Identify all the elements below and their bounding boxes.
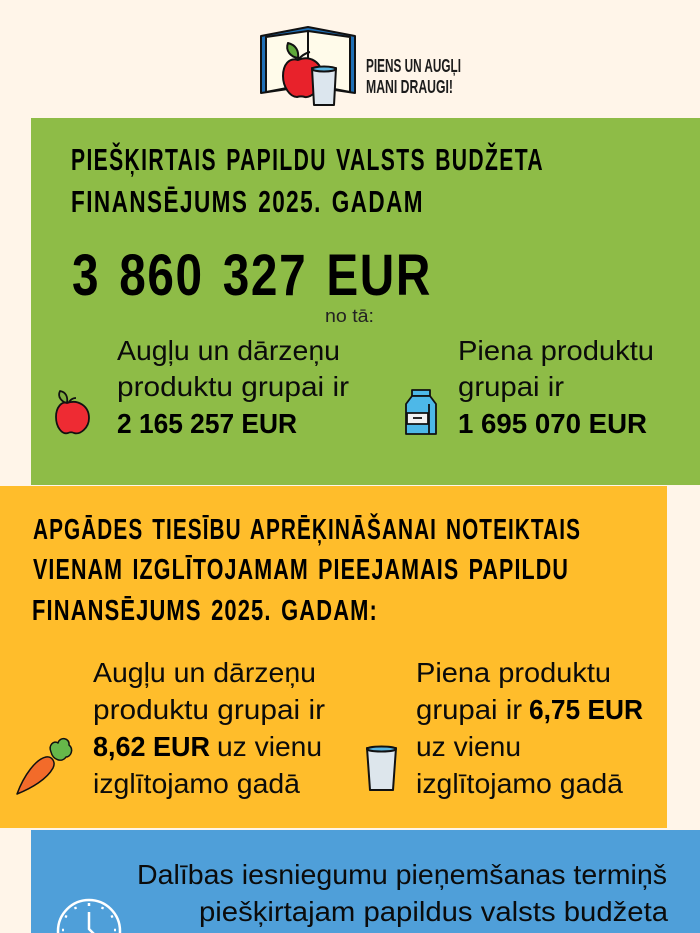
text: fruit and vegetable per pupil: 8,62 EUR: [93, 731, 210, 762]
text: dairy per pupil: Piena produktu: [416, 657, 611, 688]
panel: per-pupil funding: [0, 486, 667, 828]
text: dairy per pupil: izglītojamo gadā: [416, 768, 623, 799]
panel: application deadline: [31, 830, 700, 933]
text: dairy group: Piena produktu: [458, 335, 654, 366]
icon: open book with apple and milk glass: [261, 27, 355, 105]
text: fruit and vegetable per pupil: uz vienu: [217, 731, 322, 762]
text: fruit and vegetable per pupil: izglītojamo gadā: [93, 768, 300, 799]
icon: clock: [58, 900, 120, 933]
logo: Piens un augļi mani draugi: [261, 27, 461, 105]
text: deadline: [137, 859, 668, 927]
text: dairy group: [458, 335, 654, 439]
text: dairy group: grupai ir: [458, 371, 564, 402]
text: fruit and vegetable group: 2 165 257 EUR: [117, 408, 297, 439]
logo text: PIENS UN AUGĻI: [366, 56, 461, 76]
icon: carrot: [17, 739, 72, 794]
logo text: [366, 56, 461, 97]
icon: milk carton: [406, 390, 436, 434]
text: dairy per pupil: 6,75 EUR: [529, 694, 643, 725]
text: dairy per pupil: grupai ir: [416, 694, 522, 725]
text: fruit and vegetable per pupil: produktu grupai ir: [93, 694, 325, 725]
text: dairy per pupil: [416, 657, 643, 799]
text: deadline: piešķirtajam papildus valsts budžeta: [199, 896, 668, 927]
text: dairy group: 1 695 070 EUR: [458, 408, 647, 439]
text: deadline: Dalības iesniegumu pieņemšanas termiņš: [137, 859, 667, 890]
heading: entitlement calculation: [32, 512, 581, 627]
text: dairy per pupil: uz vienu: [416, 731, 521, 762]
logo text: MANI DRAUGI!: [366, 77, 453, 97]
text: fruit and vegetable per pupil: Augļu un dārzeņu: [93, 657, 316, 688]
icon: glass of milk: [367, 746, 396, 790]
text: fruit and vegetable per pupil: [93, 657, 325, 799]
heading: allocated additional funding: [71, 141, 544, 219]
panel: state budget funding: [31, 118, 700, 485]
total amount: 3 860 327 EUR: [72, 243, 432, 308]
heading: allocated additional funding: FINANSĒJUMS 2025. GADAM: [71, 184, 424, 219]
text: fruit and vegetable group: produktu grupai ir: [117, 371, 349, 402]
heading: entitlement calculation: FINANSĒJUMS 2025. GADAM:: [32, 595, 378, 627]
icon: apple: [56, 391, 89, 433]
text: fruit and vegetable group: [117, 335, 349, 439]
caption: of which: no tā:: [325, 306, 374, 326]
text: fruit and vegetable group: Augļu un dārzeņu: [117, 335, 340, 366]
